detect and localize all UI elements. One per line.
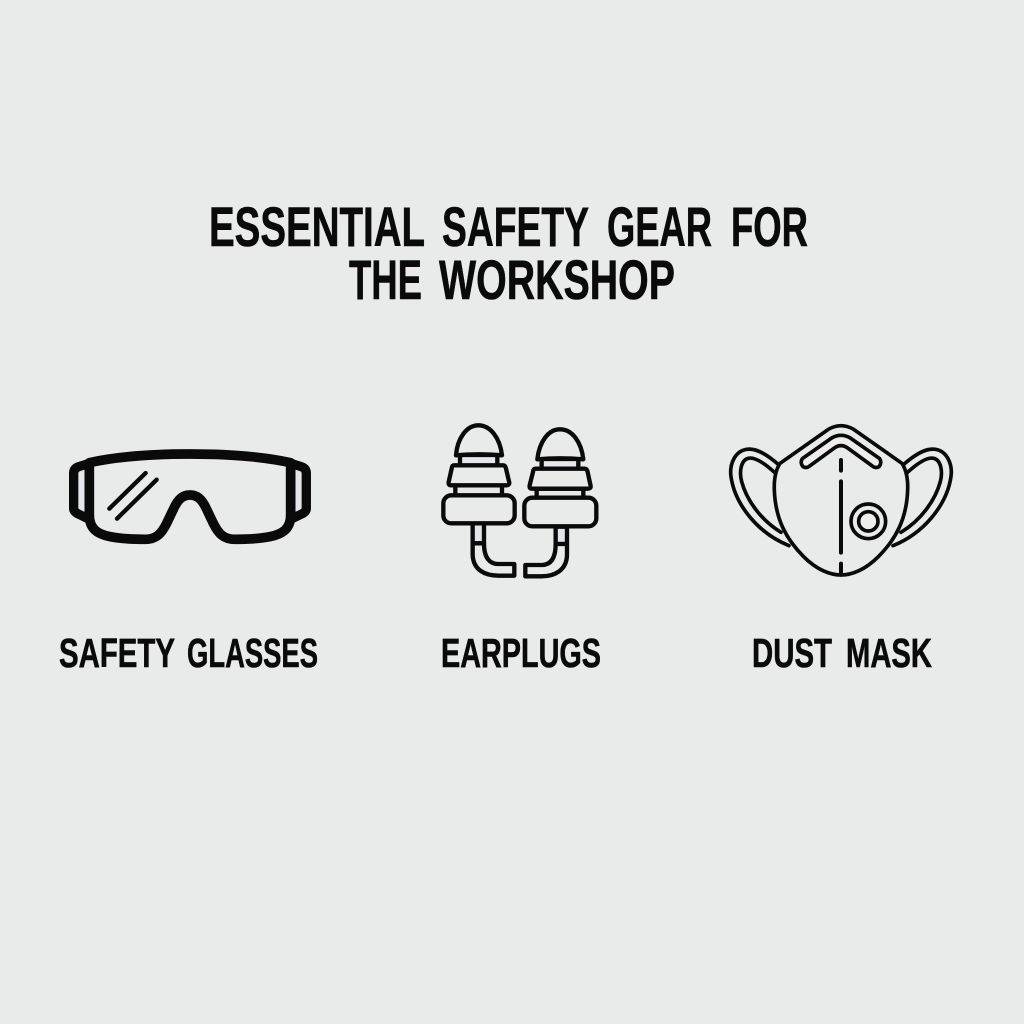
title: ESSENTIAL xyxy=(209,195,425,258)
left earplug xyxy=(443,425,515,576)
mask body xyxy=(774,426,908,575)
title xyxy=(209,195,808,311)
title: THE xyxy=(349,248,422,311)
icon: earplugs xyxy=(443,425,596,576)
label: safety glasses: GLASSES xyxy=(187,630,318,676)
label: safety glasses: SAFETY xyxy=(59,630,175,676)
centre seam xyxy=(835,460,847,575)
label: dust mask: MASK xyxy=(846,630,932,676)
label: dust mask: DUST xyxy=(752,630,832,676)
label: safety glasses xyxy=(59,630,318,676)
label: dust mask xyxy=(752,630,932,676)
title: SAFETY xyxy=(442,195,589,258)
ear straps xyxy=(731,449,951,546)
icon: safety glasses xyxy=(74,454,306,539)
right earplug xyxy=(524,429,596,576)
icon: dust mask xyxy=(731,426,951,575)
nose strip xyxy=(801,435,881,468)
title: FOR xyxy=(731,195,808,258)
title: GEAR xyxy=(607,195,712,258)
label: earplugs: EARPLUGS xyxy=(441,630,601,676)
title: WORKSHOP xyxy=(439,248,675,311)
valve xyxy=(851,504,886,539)
